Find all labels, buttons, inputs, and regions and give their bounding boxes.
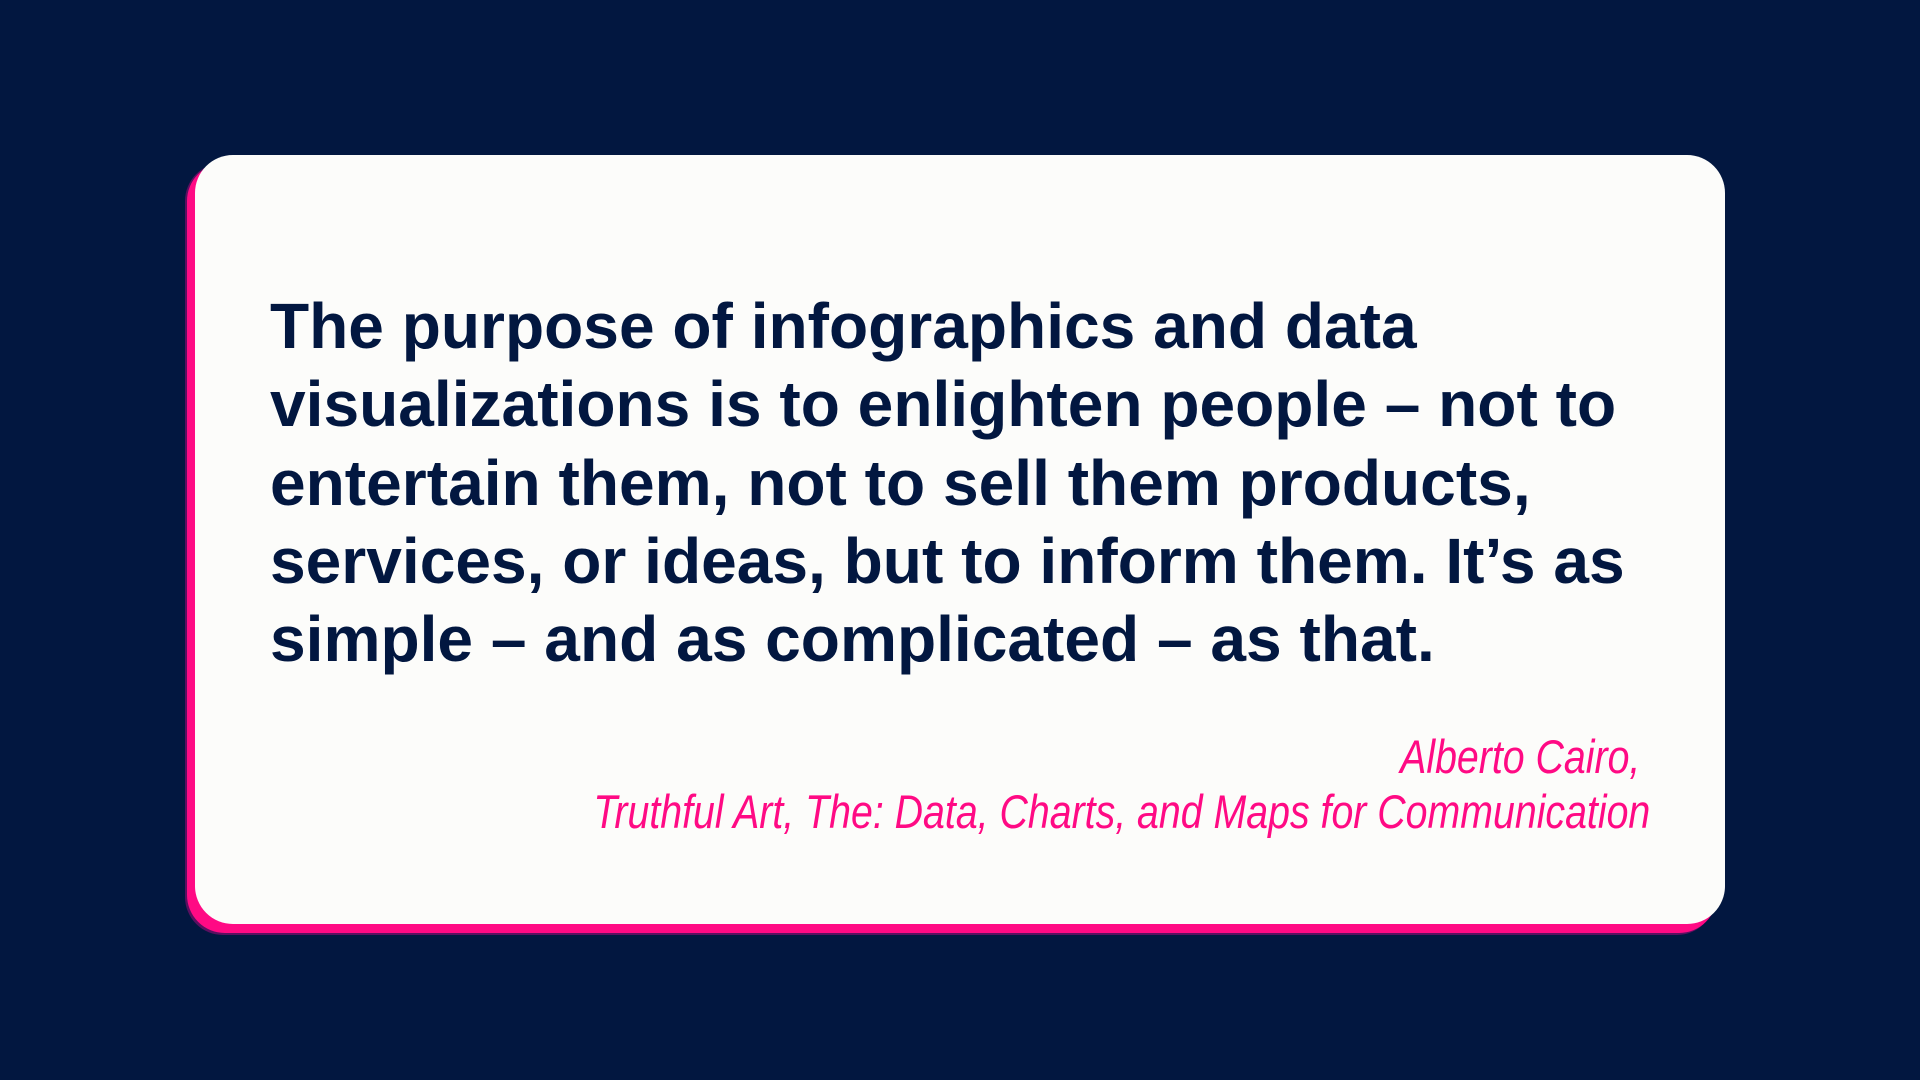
quote text: visualizations is to enlighten people – not to bbox=[270, 368, 1616, 440]
quote text: entertain them, not to sell them products, bbox=[270, 447, 1531, 519]
attribution: Truthful Art, The: Data, Charts, and Maps for Communication bbox=[593, 785, 1650, 838]
attribution: Alberto Cairo, bbox=[1400, 730, 1640, 783]
quote text: simple – and as complicated – as that. bbox=[270, 603, 1435, 675]
card shadow bbox=[185, 163, 1715, 935]
attribution bbox=[593, 730, 1650, 838]
pink card edge bbox=[187, 163, 1717, 933]
quote text: The purpose of infographics and data bbox=[270, 290, 1417, 362]
quote text bbox=[270, 290, 1625, 675]
panel: quote card bbox=[195, 155, 1725, 924]
quote text: services, or ideas, but to inform them. It’s as bbox=[270, 525, 1625, 597]
